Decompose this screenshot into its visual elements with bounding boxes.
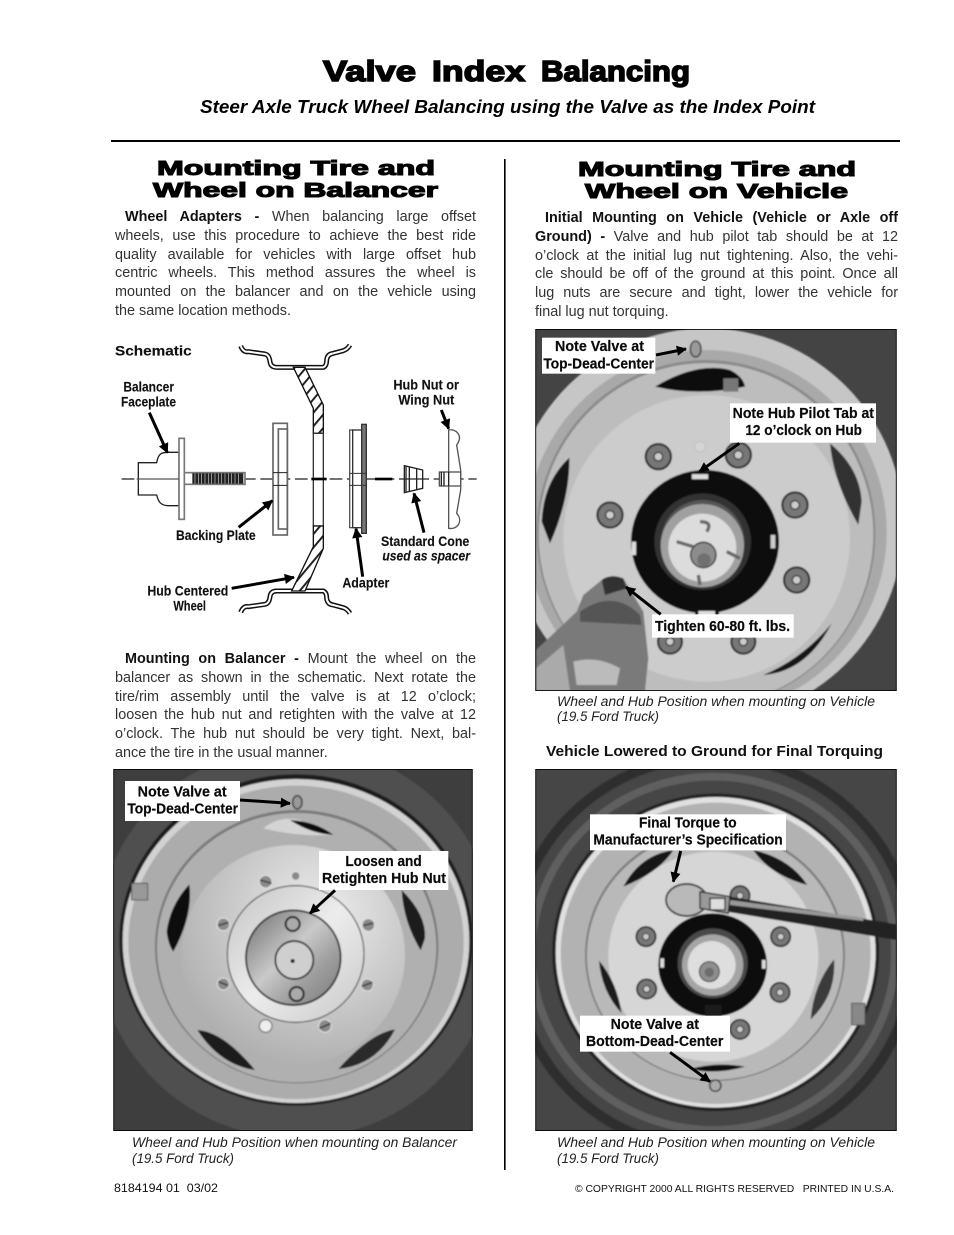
wing nut drawing bbox=[439, 430, 461, 529]
arrow: backing plate bbox=[239, 501, 272, 527]
callout: note valve at bottom-dead-center: Bottom-Dead-Center bbox=[586, 1034, 724, 1050]
photo: wheel on balancer bbox=[113, 769, 473, 1131]
text block: initial mounting on vehicle: lug nuts are secure and tight, lower the vehicle for bbox=[535, 285, 898, 301]
caption: balancer photo: Wheel and Hub Position when mounting on Balancer bbox=[132, 1135, 458, 1150]
callout: note valve at top-dead-center: Top-Dead-Center bbox=[543, 356, 654, 372]
torque wrench bbox=[727, 897, 897, 940]
caption: balancer photo bbox=[132, 1135, 458, 1166]
callout: final torque to manufacturer's specification bbox=[590, 814, 786, 882]
callout: note valve at bottom-dead-center bbox=[580, 1016, 730, 1082]
text block: wheel adapters: mounted on the balancer and on the vehicle using bbox=[115, 284, 476, 300]
heading: mounting tire and wheel on vehicle: Wheel on Vehicle bbox=[585, 180, 848, 203]
text block: initial mounting on vehicle: Ground) - Valve and hub pilot tab should be at 12 bbox=[535, 229, 898, 245]
text block: mounting on balancer: o’clock. The hub nut should be very tight. Next, bal- bbox=[115, 726, 476, 742]
adapter drawing bbox=[350, 424, 366, 533]
callout: note hub pilot tab at 12 o'clock on hub bbox=[699, 403, 876, 472]
heading: mounting tire and wheel on balancer bbox=[153, 157, 438, 202]
heading: mounting tire and wheel on balancer: Wheel on Balancer bbox=[153, 179, 438, 202]
text block: mounting on balancer bbox=[115, 651, 476, 761]
photo border bbox=[535, 329, 897, 691]
photo: vehicle lowered to ground bbox=[535, 769, 897, 1131]
wheel drawing bbox=[513, 757, 913, 1150]
callout: final torque to manufacturer's specification: Manufacturer’s Specification bbox=[593, 833, 783, 849]
schematic part labels: Hub Centered bbox=[147, 582, 228, 598]
text block: wheel adapters: wheels, use this procedure to achieve the best ride bbox=[115, 228, 476, 244]
text block: initial mounting on vehicle: cle should be off of the ground at this point. Once all bbox=[535, 266, 898, 282]
schematic diagram bbox=[115, 342, 477, 615]
callout: final torque to manufacturer's specification: Final Torque to bbox=[639, 816, 737, 832]
impact wrench bbox=[536, 576, 648, 691]
callout: note hub pilot tab at 12 o'clock on hub: 12 o’clock on Hub bbox=[745, 423, 862, 439]
heading: mounting tire and wheel on vehicle bbox=[578, 158, 856, 203]
backing plate drawing bbox=[273, 423, 287, 535]
arrow: hub centered wheel bbox=[232, 577, 294, 588]
title bbox=[323, 56, 690, 88]
callout: note valve at top-dead-center bbox=[542, 338, 686, 374]
text block: mounting on balancer: loosen the hub nut and retighten with the valve at 12 bbox=[115, 707, 476, 723]
text block: wheel adapters: the same location methods. bbox=[115, 303, 291, 319]
caption: vehicle photo two bbox=[557, 1135, 875, 1166]
schematic part labels: Wing Nut bbox=[398, 392, 455, 408]
callout: note valve at top-dead-center: Top-Dead-Center bbox=[127, 802, 238, 818]
schematic part labels: Hub Nut or bbox=[393, 376, 459, 392]
arrow: standard cone bbox=[414, 493, 424, 533]
schematic part labels: Backing Plate bbox=[176, 527, 256, 543]
subtitle: Steer Axle Truck Wheel Balancing using the Valve as the Index Point bbox=[200, 97, 816, 117]
text block: initial mounting on vehicle: Initial Mounting on Vehicle (Vehicle or Axle off bbox=[545, 210, 898, 226]
photo border bbox=[535, 769, 897, 1131]
wheel drawing bbox=[97, 745, 497, 1138]
hub centered wheel cross-section bbox=[241, 345, 350, 613]
callout: note hub pilot tab at 12 o'clock on hub: Note Hub Pilot Tab at bbox=[733, 406, 874, 422]
photo: wheel on vehicle, initial mounting bbox=[535, 329, 897, 691]
schematic part labels: Wheel bbox=[173, 598, 206, 614]
text block: mounting on balancer: ance the tire in the usual manner. bbox=[115, 745, 328, 761]
caption: balancer photo: (19.5 Ford Truck) bbox=[132, 1151, 234, 1166]
text block: mounting on balancer: balancer as shown in the schematic. Next rotate the bbox=[115, 670, 476, 686]
heading: mounting tire and wheel on vehicle: Mounting Tire and bbox=[578, 158, 856, 181]
caption: vehicle photo two: Wheel and Hub Position when mounting on Vehicle bbox=[557, 1135, 875, 1150]
title: Index bbox=[432, 56, 525, 88]
standard cone drawing bbox=[404, 466, 423, 493]
text block: wheel adapters: quality available for vehicles with large offset hub bbox=[115, 247, 476, 263]
callout: note valve at top-dead-center: Note Valve at bbox=[138, 785, 227, 801]
balancer faceplate drawing bbox=[137, 438, 245, 519]
callout: tighten 60-80 ft. lbs. bbox=[626, 587, 794, 638]
schematic part labels: Adapter bbox=[342, 574, 390, 590]
text block: wheel adapters: centric wheels. This method assures the wheel is bbox=[115, 265, 476, 281]
schematic part labels bbox=[121, 376, 471, 614]
caption: vehicle photo one: (19.5 Ford Truck) bbox=[557, 709, 659, 724]
subheading: vehicle lowered to ground: Vehicle Lowered to Ground for Final Torquing bbox=[546, 743, 883, 760]
callout: loosen and retighten hub nut: Loosen and bbox=[345, 854, 422, 870]
wheel drawing bbox=[510, 328, 903, 722]
schematic label: Schematic bbox=[115, 342, 192, 358]
arrow: hub nut bbox=[441, 410, 449, 429]
text block: mounting on balancer: tire/rim assembly until the valve is at 12 o’clock; bbox=[115, 689, 476, 705]
text block: initial mounting on vehicle: final lug nut torquing. bbox=[535, 304, 669, 320]
caption: vehicle photo two: (19.5 Ford Truck) bbox=[557, 1151, 659, 1166]
title: Balancing bbox=[541, 56, 690, 88]
schematic part labels: Balancer bbox=[123, 379, 174, 395]
schematic part labels: Faceplate bbox=[121, 394, 176, 410]
photo border bbox=[113, 769, 473, 1131]
caption: vehicle photo one: Wheel and Hub Position when mounting on Vehicle bbox=[557, 694, 875, 709]
callout: note valve at top-dead-center: Note Valve at bbox=[555, 339, 644, 355]
callout: loosen and retighten hub nut: Retighten Hub Nut bbox=[322, 871, 446, 887]
text block: initial mounting on vehicle: o’clock at the initial lug nut tightening. Also, the vehi- bbox=[535, 248, 898, 264]
text block: mounting on balancer: Mounting on Balancer - Mount the wheel on the bbox=[125, 651, 476, 667]
arrow: balancer faceplate bbox=[149, 413, 167, 453]
heading: mounting tire and wheel on balancer: Mounting Tire and bbox=[157, 157, 435, 180]
caption: vehicle photo one bbox=[557, 694, 875, 724]
callout: note valve at bottom-dead-center: Note Valve at bbox=[611, 1017, 699, 1033]
callout: loosen and retighten hub nut bbox=[310, 851, 448, 913]
callout: note valve at top-dead-center bbox=[125, 781, 290, 821]
footer part number: 8184194 01 03/02 bbox=[114, 1181, 218, 1195]
arrow: adapter bbox=[356, 529, 363, 577]
center axis line bbox=[122, 477, 477, 481]
footer copyright: © COPYRIGHT 2000 ALL RIGHTS RESERVED PRINTED IN U.S.A. bbox=[575, 1184, 894, 1195]
text block: wheel adapters bbox=[115, 209, 476, 319]
text block: wheel adapters: Wheel Adapters - When balancing large offset bbox=[125, 209, 476, 225]
text block: initial mounting on vehicle bbox=[535, 210, 898, 320]
title: Valve bbox=[323, 56, 416, 88]
callout: tighten 60-80 ft. lbs.: Tighten 60-80 ft. lbs. bbox=[655, 619, 790, 635]
